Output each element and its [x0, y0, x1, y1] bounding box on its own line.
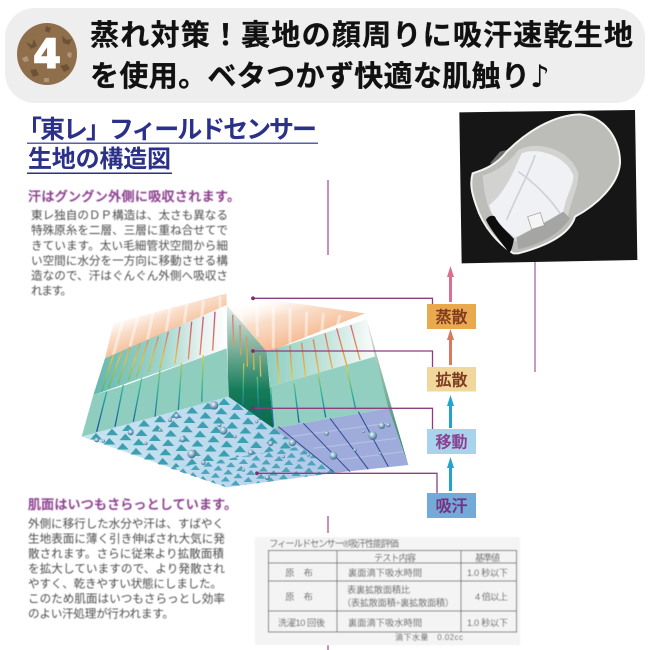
table grid — [268, 550, 516, 632]
right side lower layer — [270, 357, 388, 428]
label: absorb sweat: 吸汗 — [435, 498, 468, 516]
table text: 表裏拡散面積比 — [347, 584, 410, 595]
table text — [278, 552, 508, 628]
table text: 原 布 — [285, 567, 313, 578]
arrow: transfer to diffusion — [447, 395, 454, 428]
label: diffusion — [427, 367, 476, 392]
stripes upper right — [277, 325, 360, 383]
notch inner face — [227, 305, 273, 428]
body copy: skin: のよい汗処理が行われます。 — [28, 606, 174, 620]
left side upper layer — [93, 305, 227, 395]
right side upper layer — [267, 319, 375, 387]
label: evaporation — [427, 304, 476, 329]
table text: 4 倍以上 — [475, 591, 508, 602]
body copy: skin: このため肌面はいつもさらっとし効率 — [28, 592, 225, 606]
decorative pink bar — [327, 180, 329, 650]
fabric structure diagram — [82, 293, 408, 487]
underside violet panel — [273, 408, 408, 473]
table text: 1.0 秒以下 — [467, 567, 508, 578]
left side lower layer — [82, 348, 229, 437]
leader: diffusion — [253, 351, 432, 367]
arrow: up to air — [447, 266, 454, 302]
subheading: absorption: 汗はグングン外側に吸収されます。 — [28, 189, 240, 204]
body copy: skin: 生地表面に薄く引き伸ばされ大気に発 — [28, 532, 225, 546]
cap brim — [471, 114, 620, 253]
table text: 洗濯10 回後 — [278, 617, 325, 628]
body copy: skin: やすく、乾きやすい状態にしました。 — [28, 576, 222, 590]
leader: transfer — [253, 408, 432, 429]
body copy: absorption: い空間に水分を一方向に移動させる構 — [31, 254, 228, 268]
stripes upper left — [97, 312, 360, 432]
hat photo — [459, 110, 637, 263]
table text: 1.0 秒以下 — [467, 617, 508, 628]
music note glyph: ♪ — [530, 59, 550, 95]
water droplets — [94, 401, 390, 480]
stripes notch — [233, 315, 261, 377]
section title — [17, 116, 318, 174]
body copy: skin: 外側に移行した水分や汗は、すばやく — [28, 516, 224, 530]
body copy: absorption: 造なので、汗はぐんぐん外側へ吸収さ — [31, 268, 228, 282]
leader: absorption — [257, 473, 437, 493]
headline line 1: 蒸れ対策！裏地の顔周りに吸汗速乾生地 — [90, 19, 633, 52]
table text: テスト内容 — [374, 552, 416, 563]
crown seam shading — [507, 155, 560, 220]
table text: 裏面滴下吸水時間 — [348, 617, 422, 628]
arrow: diffusion to evaporation — [447, 329, 454, 365]
body copy: skin: を拡大していますので、より発散され — [28, 562, 225, 576]
vapour haze — [105, 293, 365, 358]
cap lining — [489, 151, 573, 238]
table text: （表拡散面積÷裏拡散面積） — [342, 597, 454, 608]
label: transfer — [427, 429, 476, 454]
label: transfer: 移動 — [435, 434, 468, 452]
section title: 「東レ」フィールドセンサー — [17, 116, 317, 144]
badge: number 4 — [17, 23, 77, 85]
table backing — [255, 537, 520, 645]
lower sweatband — [517, 212, 570, 249]
photo backdrop — [459, 110, 637, 263]
label: evaporation: 蒸散 — [435, 308, 468, 326]
label: diffusion: 拡散 — [435, 372, 468, 390]
headline line 2: を使用。ベタつかず快適な肌触り — [90, 60, 530, 93]
header background — [5, 8, 645, 103]
table text: 基準値 — [475, 552, 500, 563]
body copy: skin — [28, 516, 225, 620]
subheading: skin: 肌面はいつもさらっとしています。 — [28, 497, 237, 512]
inner band around crown — [483, 146, 578, 242]
table text: 裏面滴下吸水時間 — [348, 567, 422, 578]
leader dots — [251, 296, 259, 475]
care tag — [528, 213, 544, 229]
far edge — [367, 319, 408, 465]
back strap — [486, 216, 514, 253]
label: absorb sweat — [427, 493, 476, 518]
leader: evaporation — [253, 298, 432, 304]
stripes lower right — [271, 367, 356, 427]
side mesh behind brim — [490, 148, 513, 165]
body copy: absorption: きています。太い毛細管状空間から細 — [31, 238, 228, 252]
section title: 生地の構造図 — [28, 146, 171, 173]
body copy: skin: 散されます。さらに従来より拡散面積 — [28, 546, 224, 560]
leader: hat photo line — [534, 262, 536, 372]
underside triangles small — [170, 447, 337, 487]
body copy: absorption: 特殊原糸を二層、三層に重ね合せてで — [31, 223, 228, 237]
violet panel ribs — [278, 412, 403, 472]
table title: フィールドセンサー®吸汗性能評価 — [269, 538, 399, 550]
text block: sweat absorption — [28, 189, 240, 298]
stripes lower left — [97, 355, 203, 432]
underside triangles large — [82, 397, 300, 468]
performance table — [255, 537, 520, 645]
badge: number 4: 4 — [33, 32, 61, 78]
header panel — [5, 8, 645, 103]
table footnote: 滴下水量 0.02cc — [395, 632, 463, 642]
body copy: absorption — [31, 208, 228, 298]
underside light panel — [82, 397, 337, 487]
text block: skin stays dry — [28, 497, 237, 620]
body copy: absorption: れます。 — [31, 284, 72, 298]
table text: 原 布 — [285, 591, 313, 602]
body copy: absorption: 東レ独自のＤＰ構造は、太さも異なる — [31, 208, 228, 222]
arrow: absorption to transfer — [447, 457, 454, 491]
leader lines — [251, 296, 437, 493]
